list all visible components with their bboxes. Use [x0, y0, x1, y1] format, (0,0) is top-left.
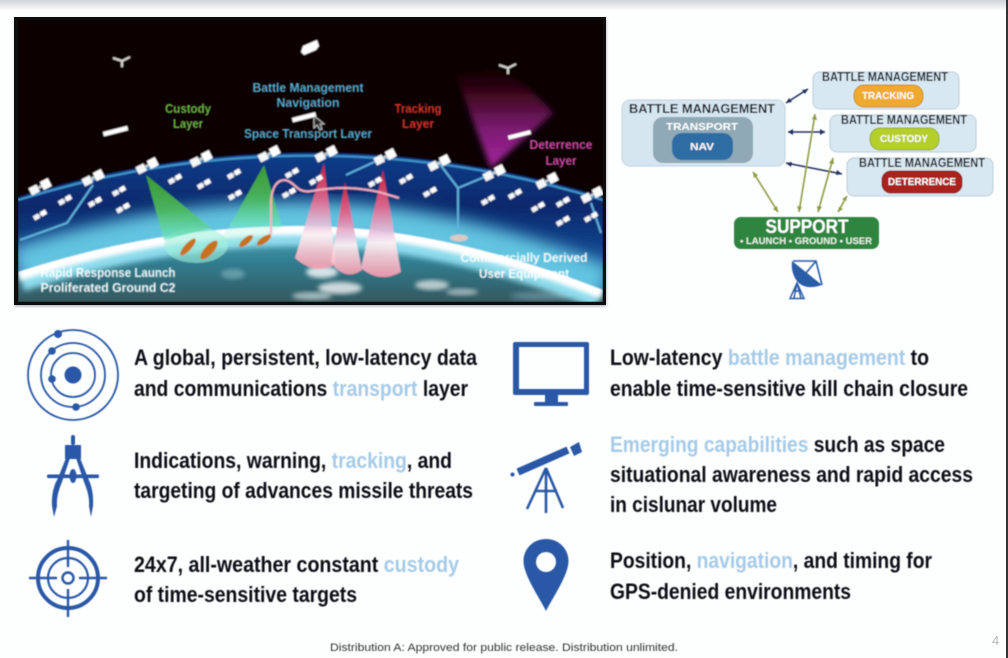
text: battle management: Low-latency battle management to — [610, 345, 929, 370]
icon: telescope — [510, 442, 582, 513]
satellites — [28, 40, 604, 227]
box: support: • LAUNCH • GROUND • USER — [740, 236, 872, 247]
image labels — [40, 80, 592, 295]
text: emerging capabilities: Emerging capabilities such as space — [610, 432, 945, 457]
box: battle management transport nav: TRANSPORT — [666, 121, 739, 133]
box: battle management deterrence — [847, 155, 993, 196]
image labels: Rapid Response Launch — [40, 265, 176, 280]
missiles — [178, 233, 273, 262]
text: emerging capabilities: in cislunar volume — [610, 492, 777, 517]
text: navigation — [610, 548, 932, 604]
image labels: Layer — [402, 116, 434, 131]
deterrence cone — [455, 68, 553, 168]
arrows: support links — [753, 114, 847, 212]
icon: monitor — [513, 342, 589, 406]
box: support — [734, 217, 879, 249]
text: transport: and communications transport layer — [134, 376, 468, 401]
text: navigation: Position, navigation, and timing for — [610, 548, 932, 573]
box: battle management custody — [830, 112, 976, 152]
icon: satellite dish — [790, 261, 822, 298]
image labels: Commercially Derived — [460, 250, 588, 265]
image labels: Layer — [173, 116, 203, 131]
box: battle management tracking: BATTLE MANAGEMENT — [822, 69, 948, 84]
text: navigation: GPS-denied environments — [610, 579, 851, 604]
network links — [20, 157, 601, 240]
text: custody: of time-sensitive targets — [134, 582, 357, 607]
icon: map pin — [524, 539, 568, 611]
missile trajectory — [263, 180, 399, 243]
box: battle management deterrence: BATTLE MANAGEMENT — [859, 155, 985, 170]
text: transport: A global, persistent, low-latency data — [134, 345, 478, 370]
image labels: Deterrence — [530, 137, 592, 152]
tracking beams — [295, 163, 401, 277]
panel: space architecture illustration — [14, 17, 606, 305]
mouse cursor — [314, 116, 324, 130]
box: battle management transport nav: NAV — [690, 141, 714, 153]
orbital ring link — [18, 156, 603, 200]
image labels: Custody — [165, 101, 212, 116]
image labels: User Equipment — [479, 266, 570, 281]
text: custody — [134, 552, 460, 607]
text: battle management: enable time-sensitive kill chain closure — [610, 376, 968, 401]
icon: orbits — [28, 330, 118, 420]
user equipment ship — [450, 234, 468, 242]
box: battle management deterrence: DETERRENCE — [888, 176, 956, 188]
custody beams — [146, 165, 282, 263]
box: battle management tracking: TRACKING — [862, 90, 914, 102]
text: emerging capabilities — [610, 432, 973, 517]
image labels: Proliferated Ground C2 — [40, 280, 176, 295]
atmosphere band — [18, 153, 603, 302]
icon: target crosshair — [29, 540, 107, 617]
image labels: Battle Management — [252, 80, 364, 95]
text: transport — [134, 345, 478, 401]
arrows: battle management links — [786, 89, 842, 175]
page number: 4 — [992, 633, 999, 648]
text: battle management — [610, 345, 968, 401]
image labels: Space Transport Layer — [244, 126, 372, 141]
box: battle management transport nav — [622, 100, 785, 166]
text: tracking: Indications, warning, tracking, and — [134, 448, 452, 473]
box: support: SUPPORT — [766, 217, 849, 238]
icon: drafting compass — [47, 435, 99, 517]
text: tracking — [134, 448, 473, 503]
image labels: Layer — [546, 153, 576, 168]
box: battle management custody: CUSTODY — [880, 133, 928, 145]
atmosphere glow — [18, 226, 603, 290]
box: battle management transport nav: BATTLE MANAGEMENT — [629, 101, 775, 116]
image labels: Navigation — [276, 95, 340, 110]
image labels: Tracking — [394, 101, 442, 116]
footer distribution statement: Distribution A: Approved for public release. Distribution unlimited. — [330, 642, 678, 654]
box: battle management custody: BATTLE MANAGEMENT — [841, 112, 967, 127]
text: tracking: targeting of advances missile threats — [134, 478, 473, 503]
earth — [18, 226, 603, 302]
panel: battle management diagram — [622, 69, 993, 298]
box: battle management tracking — [813, 69, 959, 109]
text: custody: 24x7, all-weather constant custody — [134, 552, 460, 577]
